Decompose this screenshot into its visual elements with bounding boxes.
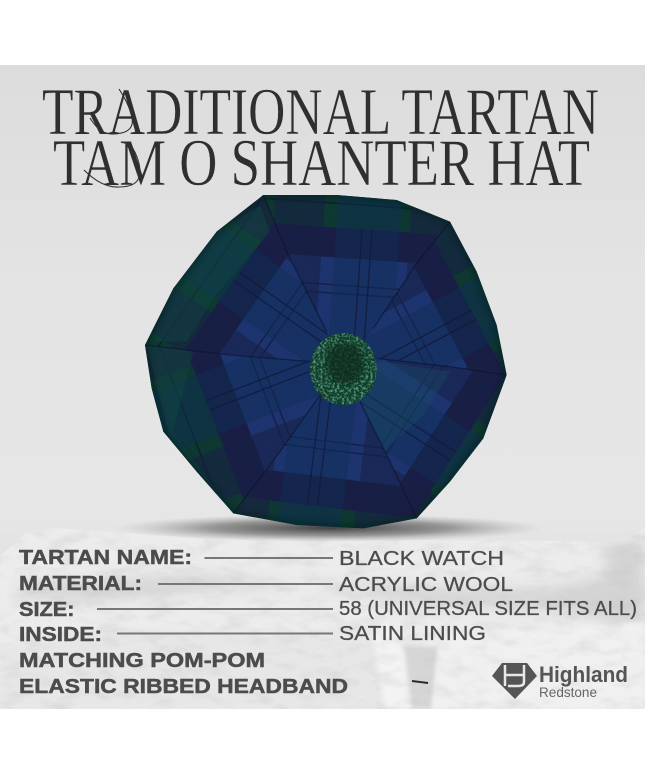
row: tartan name (19, 547, 504, 570)
row: material: ACRYLIC WOOL (339, 574, 513, 596)
row: inside (19, 623, 486, 646)
title (42, 75, 599, 200)
hat shadow (115, 514, 545, 542)
panel: lower right (360, 358, 506, 518)
panel seams (145, 195, 507, 518)
row: tartan name: BLACK WATCH (339, 548, 504, 570)
panel: top (264, 195, 450, 340)
tartan hat (145, 195, 507, 528)
logo (492, 662, 628, 700)
panel: bottom (234, 396, 416, 528)
row: size: SIZE: (19, 599, 74, 621)
lower left rock (0, 615, 412, 709)
logo subtitle: Redstone (539, 684, 597, 700)
row: size (19, 598, 637, 621)
rock gap (400, 645, 438, 709)
row: tartan name: TARTAN NAME: (19, 547, 192, 569)
row: inside: INSIDE: (19, 624, 102, 646)
lower right rock (608, 622, 644, 634)
rock texture (0, 530, 645, 709)
panel: upper right (364, 222, 506, 374)
rock shaded ledge (20, 540, 645, 630)
row: material (19, 573, 513, 596)
row: size: 58 (UNIVERSAL SIZE FITS ALL) (339, 598, 637, 620)
row: material: MATERIAL: (19, 573, 142, 595)
icon: diamond (492, 663, 537, 699)
row: inside: SATIN LINING (339, 623, 486, 645)
hat edge shading (145, 195, 507, 528)
rock crack (412, 681, 428, 683)
logo wordmark: Highland (539, 662, 628, 687)
spec rows (19, 547, 637, 698)
panel: lower left (145, 346, 320, 514)
panel: upper left (145, 195, 329, 362)
feature: matching pom-pom: MATCHING POM-POM (19, 650, 265, 672)
lower left rock edge (374, 624, 410, 708)
feature: elastic ribbed headband: ELASTIC RIBBED HEADBAND (19, 676, 348, 698)
pom-pom (310, 333, 377, 405)
rock podium (0, 528, 645, 709)
